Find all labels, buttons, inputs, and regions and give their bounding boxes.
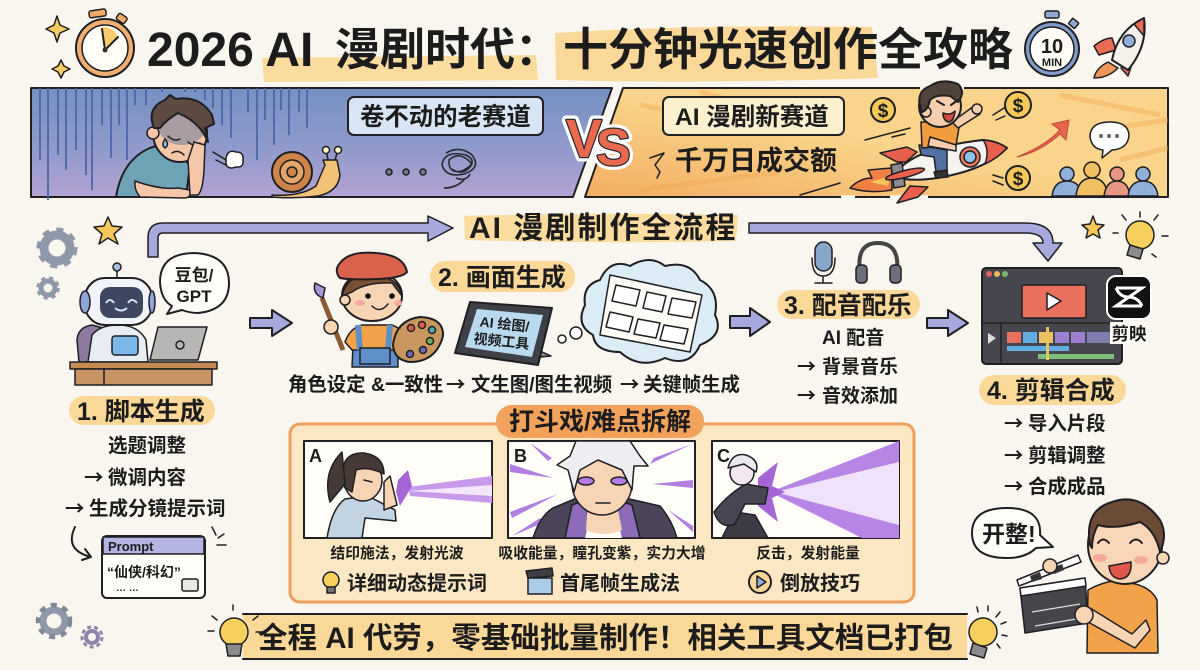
crowd [1052,162,1158,196]
icon: 10 min stopwatch: 10 [1041,36,1063,58]
label: old track [348,97,543,135]
step 4 text: 导入片段 [1028,412,1106,435]
icon: microphone [812,242,835,283]
banner gaps [841,88,964,197]
step 4 text: → [1004,407,1023,436]
captions [330,544,860,562]
VS badge: V [566,109,602,169]
label: new track [663,97,844,135]
tip: first last frame [526,568,680,595]
icon: capcut logo: 剪映 [1112,324,1147,344]
title: 十分钟光速创作全攻略 [563,24,1013,75]
editor window [982,268,1122,364]
dots [386,169,426,175]
step 2 text: → [446,368,465,397]
icon: 10 min stopwatch: MIN [1042,57,1062,69]
icon: 10 min stopwatch [1025,11,1079,76]
boy on rocket [850,81,1007,203]
frame C: C [717,446,730,466]
puff [213,151,243,168]
icon: star right [1082,216,1104,238]
label: new track: AI 漫剧新赛道 [675,102,829,131]
frame B: B [514,446,527,466]
icon: bulb left [208,605,262,656]
icon: bulb top right [1113,212,1168,259]
step 4 text: 合成成品 [1028,475,1106,498]
step 1 text [65,435,226,521]
coin symbols: $ [1013,96,1024,117]
step 4 heading: 4. 剪辑合成 [987,377,1115,405]
icon: rocket top [1094,18,1145,78]
footer banner [243,614,967,660]
speech bubble [1090,122,1129,158]
title: 2026 AI [147,24,313,77]
step 3 text: → [797,352,816,379]
arrow: flow right [749,223,1062,261]
step 1 text: 微调内容 [108,466,186,489]
coin symbols [878,96,1024,190]
coins [871,92,1031,190]
captions: 反击，发射能量 [756,544,860,562]
heading: workflow: AI 漫剧制作全流程 [469,212,737,245]
text: daily sales: 千万日成交额 [675,146,837,176]
prompt box: Prompt [108,539,154,554]
panel: old track banner [31,88,612,200]
step 1 text: 生成分镜提示词 [89,497,226,520]
tip: reverse playback [749,571,860,595]
icon: star [94,217,122,244]
VS badge: V [566,109,602,169]
callout: doubao gpt [160,253,229,314]
title: 漫剧时代： [335,24,560,75]
arrow: step 1 to 2 [250,310,292,336]
step 2 illustration: painter [314,253,443,367]
step 3 text: 背景音乐 [822,355,898,378]
step 2 text: 角色设定 &一致性 [288,373,443,396]
coin symbols: $ [878,101,889,122]
coin symbols: $ [1013,169,1024,190]
step 2 text [288,368,740,397]
thought bubble [558,260,718,363]
icon: bulb right [969,606,1007,658]
arrow: step 3 to 4 [927,310,968,336]
boy with clapperboard [1017,499,1169,653]
frame C [712,441,899,538]
callout: kaizheng [972,508,1053,558]
icon: capcut logo [1107,276,1151,344]
step 3 text: → [797,381,816,408]
step 3 text: AI 配音 [822,326,884,349]
step 2 text: → [620,368,639,397]
curved arrow [72,527,91,560]
tablet [455,302,552,365]
VS badge: S [596,119,631,177]
label: old track: 卷不动的老赛道 [360,103,531,131]
step 2 text: 文生图/图生视频 [471,373,612,396]
icon: gears top left [38,230,75,298]
arrow: flow left [148,216,453,257]
tip: detailed prompt: 详细动态提示词 [347,571,487,595]
rain lines [40,88,307,200]
up arrow [1017,120,1069,157]
VS badge [566,109,631,177]
frame A [304,441,492,538]
footer banner: 全程 AI 代劳，零基础批量制作！相关工具文档已打包 [258,622,953,655]
tablet: 视频工具 [473,330,530,352]
prompt box: … … [116,583,139,594]
icon: gears bottom left [38,605,102,647]
step 4 text: 剪辑调整 [1028,445,1106,467]
step 1 text: → [84,461,104,490]
step 1 heading: 1. 脚本生成 [77,398,205,426]
icon: sparkles [46,16,70,78]
step 1 illustration: robot at desk [70,263,217,385]
icon: headphones [856,243,901,283]
step 1 text: 选题调整 [108,435,186,457]
step 3 text [797,326,898,408]
tip: reverse playback: 倒放技巧 [780,572,860,595]
icon: stopwatch left [76,9,134,77]
scribble [442,149,476,188]
step 3 text: 音效添加 [822,384,898,407]
VS badge: S [596,119,631,177]
step 2 text: 关键帧生成 [643,373,740,396]
arrow: step 2 to 3 [730,308,770,336]
captions: 吸收能量，瞳孔变紫，实力大增 [498,544,706,562]
snail [272,146,342,198]
tablet: AI 绘图/ [479,313,530,335]
title [147,24,1013,82]
callout: kaizheng: 开整! [982,521,1036,547]
speed lines [800,108,1005,195]
callout: doubao gpt: 豆包/ [175,265,214,285]
panel heading: 打斗戏/难点拆解 [509,408,691,436]
step 1 text: → [65,492,85,521]
panel: fight scene breakdown [290,405,914,602]
step 2 heading: 2. 画面生成 [438,264,566,292]
prompt box [102,527,226,598]
step 3 heading: 3. 配音配乐 [784,292,912,320]
captions: 结印施法，发射光波 [330,544,464,562]
step 4 text [1004,407,1106,499]
callout: doubao gpt: GPT [177,287,212,306]
sad boy [116,95,214,198]
prompt box: “仙侠/科幻” [107,564,181,580]
tip: first last frame: 首尾帧生成法 [560,571,680,595]
frame A: A [309,446,322,466]
step 4 text: → [1004,439,1023,468]
frame B [508,441,695,538]
step 4 text: → [1004,470,1023,499]
panel: new track banner [585,81,1168,203]
